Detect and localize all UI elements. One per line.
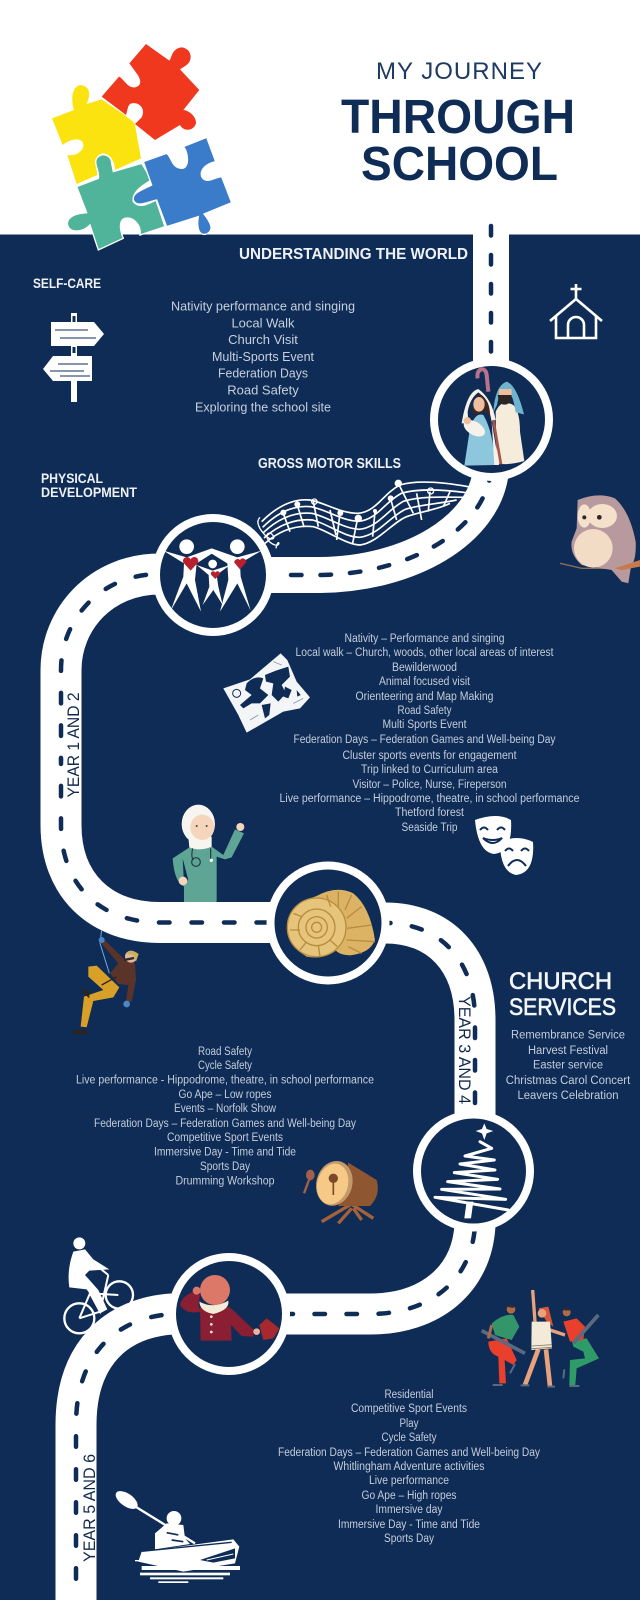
label: year 1 and 2: YEAR 1 AND 2 bbox=[64, 692, 83, 798]
heading: church services: CHURCH bbox=[509, 968, 612, 995]
title bbox=[341, 58, 575, 191]
puzzle logo bbox=[52, 44, 232, 250]
text block: understanding the world activities: Local Walk bbox=[231, 316, 295, 330]
text block: year 3 and 4 activities: Live performance - Hippodrome, theatre, in school performance bbox=[76, 1074, 374, 1086]
text block: year 1 and 2 activities: Trip linked to Curriculum area bbox=[361, 764, 499, 776]
text block: year 5 and 6 activities: Immersive day bbox=[376, 1504, 443, 1516]
heading: physical development: PHYSICAL bbox=[41, 470, 103, 486]
text block: year 1 and 2 activities: Multi Sports Event bbox=[382, 719, 467, 731]
heading: understanding the world: UNDERSTANDING THE WORLD bbox=[239, 246, 468, 263]
illustration: cyclist bbox=[64, 1237, 133, 1333]
hearts bbox=[183, 557, 246, 579]
text block: understanding the world activities: Nativity performance and singing bbox=[171, 298, 355, 314]
nativity figures bbox=[461, 369, 524, 466]
text block: year 5 and 6 activities: Sports Day bbox=[384, 1533, 434, 1545]
boy figure bbox=[180, 1275, 279, 1341]
text block: year 1 and 2 activities: Nativity – Performance and singing bbox=[344, 633, 504, 645]
text block: church services list: Leavers Celebration bbox=[518, 1090, 618, 1102]
text block: church services list: Harvest Festival bbox=[528, 1045, 608, 1057]
text block: year 3 and 4 activities: Drumming Workshop bbox=[176, 1176, 274, 1188]
text block: year 5 and 6 activities: Federation Days – Federation Games and Well-being Day bbox=[278, 1447, 540, 1459]
illustration: drum bbox=[304, 1157, 378, 1223]
text block: year 1 and 2 activities: Bewilderwood bbox=[392, 662, 457, 674]
waypoint: christmas tree bbox=[417, 1114, 530, 1228]
puzzle piece: blue bbox=[133, 137, 232, 234]
road bbox=[61, 215, 491, 1600]
text block: year 3 and 4 activities: Road Safety bbox=[198, 1046, 252, 1058]
text block: year 5 and 6 activities: Go Ape – High ropes bbox=[362, 1490, 457, 1502]
text block: year 5 and 6 activities: Competitive Sport Events bbox=[351, 1403, 467, 1415]
puzzle piece: yellow bbox=[52, 85, 141, 184]
text block: year 3 and 4 activities: Sports Day bbox=[200, 1161, 250, 1173]
heading: gross motor skills: GROSS MOTOR SKILLS bbox=[258, 456, 401, 472]
text block: year 5 and 6 activities: Whitlingham Adventure activities bbox=[334, 1461, 485, 1473]
title: MY JOURNEY bbox=[376, 58, 542, 85]
label: year 5 and 6: YEAR 5 AND 6 bbox=[80, 1454, 99, 1562]
waypoint: boy bbox=[172, 1257, 286, 1371]
illustration: climber bbox=[73, 930, 139, 1034]
text block: year 1 and 2 activities bbox=[280, 633, 580, 834]
text block: year 3 and 4 activities: Cycle Safety bbox=[198, 1060, 252, 1072]
text block: year 5 and 6 activities bbox=[278, 1389, 540, 1545]
text block: year 3 and 4 activities: Go Ape – Low ropes bbox=[178, 1089, 272, 1101]
text block: year 3 and 4 activities: Federation Days – Federation Games and Well-being Day bbox=[94, 1118, 356, 1130]
title: SCHOOL bbox=[361, 138, 558, 191]
text block: year 3 and 4 activities: Events – Norfolk Show bbox=[174, 1103, 277, 1115]
heading: physical development bbox=[41, 470, 137, 500]
icon: signpost bbox=[43, 313, 104, 402]
waypoint: shell bbox=[270, 866, 386, 980]
snail shell bbox=[287, 890, 375, 958]
icon: music staff bbox=[258, 480, 468, 548]
puzzle piece: teal bbox=[67, 155, 165, 250]
text block: year 1 and 2 activities: Animal focused visit bbox=[379, 676, 471, 688]
text block: year 1 and 2 activities: Seaside Trip bbox=[402, 822, 458, 834]
lane dashes bbox=[61, 226, 491, 1600]
text block: understanding the world activities: Multi-Sports Event bbox=[212, 349, 314, 364]
text block: year 5 and 6 activities: Live performance bbox=[369, 1475, 449, 1487]
text block: year 1 and 2 activities: Visitor – Police, Nurse, Fireperson bbox=[352, 779, 506, 791]
text block: year 5 and 6 activities: Immersive Day - Time and Tide bbox=[338, 1519, 480, 1531]
text block: understanding the world activities: Road Safety bbox=[227, 382, 299, 398]
heading: church services bbox=[509, 968, 616, 1021]
text block: year 1 and 2 activities: Federation Days – Federation Games and Well-being Day bbox=[294, 734, 556, 746]
title: THROUGH bbox=[341, 91, 575, 144]
family figures bbox=[163, 539, 262, 612]
text block: year 5 and 6 activities: Play bbox=[400, 1418, 419, 1430]
puzzle piece: red bbox=[102, 44, 199, 140]
text block: year 1 and 2 activities: Thetford forest bbox=[395, 807, 465, 819]
text block: year 5 and 6 activities: Cycle Safety bbox=[382, 1432, 437, 1444]
text block: understanding the world activities: Church Visit bbox=[228, 332, 298, 347]
dancer: green top bbox=[482, 1305, 525, 1385]
dancer: red top bbox=[562, 1308, 599, 1386]
illustration: kayak bbox=[113, 1488, 240, 1583]
text block: year 3 and 4 activities bbox=[76, 1046, 374, 1188]
text block: year 3 and 4 activities: Competitive Sport Events bbox=[167, 1132, 283, 1144]
heading: self-care: SELF-CARE bbox=[33, 275, 101, 291]
text block: year 1 and 2 activities: Live performance – Hippodrome, theatre, in school performance bbox=[280, 793, 580, 805]
text block: year 5 and 6 activities: Residential bbox=[384, 1389, 434, 1401]
icon: theatre masks bbox=[475, 816, 533, 875]
text block: church services list: Easter service bbox=[533, 1060, 603, 1072]
icon: church bbox=[550, 284, 602, 338]
text block: year 3 and 4 activities: Immersive Day - Time and Tide bbox=[154, 1146, 296, 1158]
illustration: dancers bbox=[482, 1290, 599, 1387]
text block: year 1 and 2 activities: Cluster sports events for engagement bbox=[342, 750, 517, 762]
icon: map bbox=[223, 653, 310, 733]
text block: understanding the world activities: Exploring the school site bbox=[195, 400, 331, 414]
dancer: cream top bbox=[521, 1290, 565, 1387]
illustration: nurse bbox=[173, 805, 244, 902]
text block: church services list: Remembrance Service bbox=[511, 1030, 625, 1042]
waypoint: nativity bbox=[434, 362, 549, 477]
text block: church services list bbox=[506, 1030, 631, 1102]
illustration: owl bbox=[560, 495, 640, 583]
text block: year 1 and 2 activities: Local walk – Church, woods, other local areas of interest bbox=[296, 647, 554, 659]
text block: church services list: Christmas Carol Concert bbox=[506, 1075, 631, 1087]
text block: year 1 and 2 activities: Road Safety bbox=[398, 705, 452, 717]
text block: year 1 and 2 activities: Orienteering and Map Making bbox=[356, 691, 494, 703]
text block: understanding the world activities: Federation Days bbox=[218, 366, 308, 380]
label: year 3 and 4: YEAR 3 AND 4 bbox=[455, 996, 474, 1104]
text block: understanding the world activities bbox=[171, 298, 355, 414]
waypoint: family bbox=[156, 518, 270, 632]
heading: church services: SERVICES bbox=[509, 994, 616, 1021]
heading: physical development: DEVELOPMENT bbox=[41, 484, 137, 500]
tree bbox=[435, 1123, 508, 1218]
